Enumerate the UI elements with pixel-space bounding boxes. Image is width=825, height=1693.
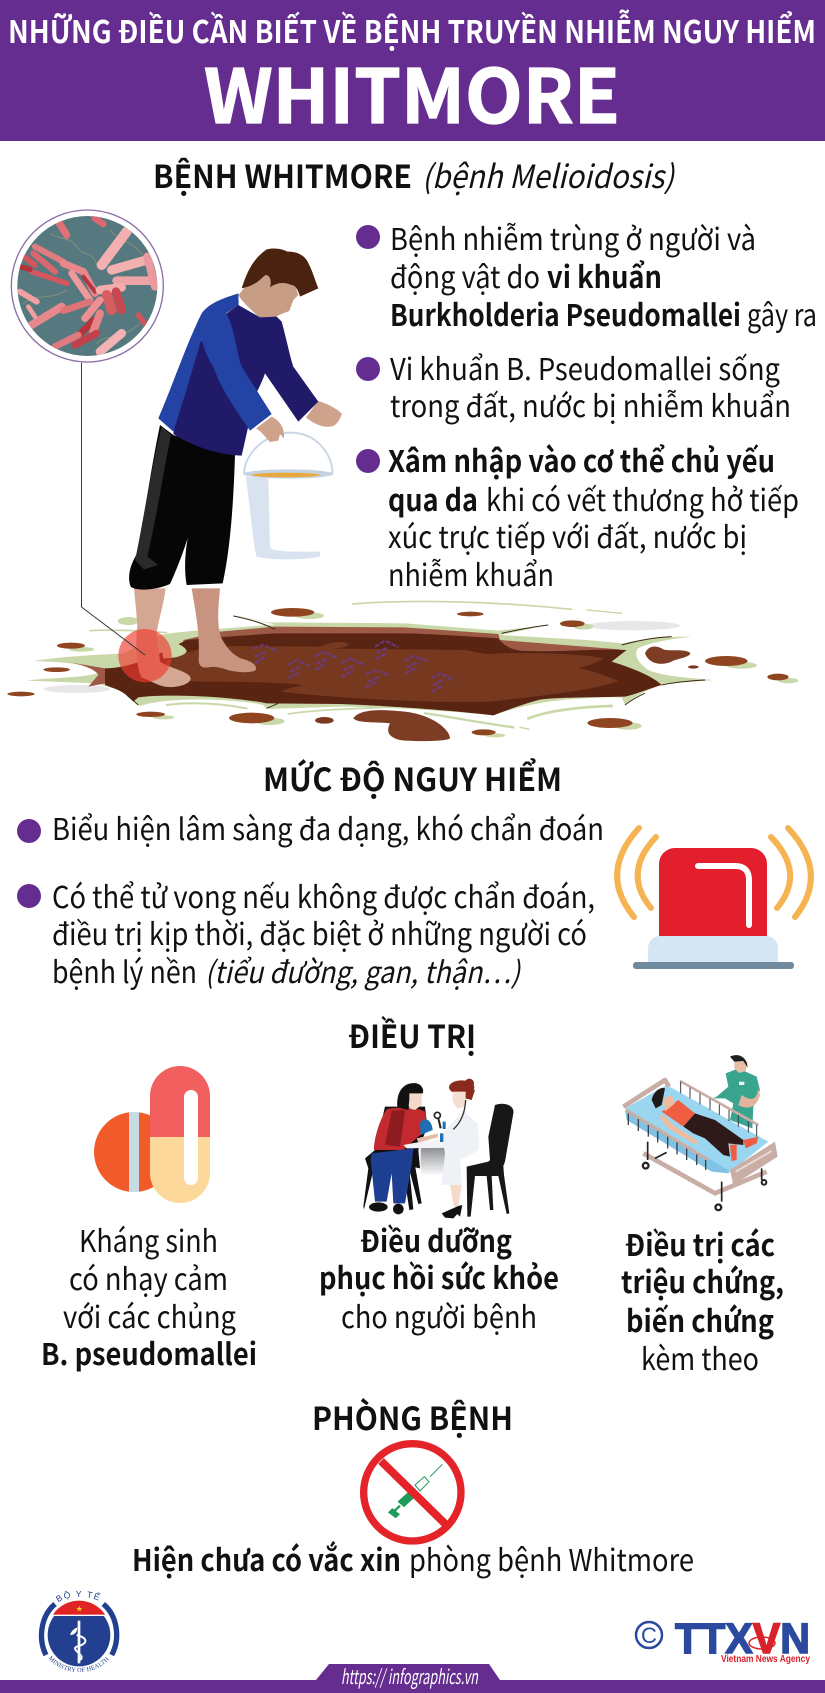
section heading: danger level: MỨC ĐỘ NGUY HIỂM [263, 755, 562, 801]
trouser stripe [135, 427, 171, 569]
treatment text: nursing care [319, 1217, 559, 1337]
light brown edge [183, 627, 662, 686]
bullets: danger level: bệnh lý nền [52, 948, 197, 992]
treatment text: symptoms: kèm theo [641, 1335, 759, 1379]
icon: no vaccine [364, 1444, 461, 1541]
bullets: disease description: Vi khuẩn B. Pseudomallei sống [390, 345, 780, 389]
far arm hand [306, 401, 342, 427]
green patch behind leg [118, 617, 139, 625]
wound highlight [118, 629, 172, 682]
bullets: disease description [356, 215, 817, 595]
foot board [730, 1142, 778, 1185]
logo: Ministry of Health: ★ [76, 1604, 83, 1613]
treatment text: symptoms: biến chứng [626, 1297, 774, 1341]
prevention text: Hiện chưa có vắc xin [132, 1536, 401, 1580]
bullets: disease description: khi có vết thương hở tiếp [486, 476, 799, 520]
mid brown mud [167, 642, 618, 702]
section heading: treatment: ĐIỀU TRỊ [348, 1012, 476, 1058]
footer url: https:// infographics.vn [341, 1661, 479, 1690]
treatment text: symptoms: Điều trị các [625, 1221, 775, 1265]
hair [242, 249, 318, 297]
footer bar [0, 1661, 825, 1693]
neck and face [238, 275, 298, 318]
bullets: danger level: Biểu hiện lâm sàng đa dạng, khó chẩn đoán [52, 805, 604, 849]
bullets: danger level: Có thể tử vong nếu không được chẩn đoán, [52, 873, 595, 917]
icon: bacteria microscope circle [11, 210, 163, 362]
logo: TTXVN: C [641, 1623, 657, 1648]
treatment text: antibiotics: Kháng sinh [79, 1217, 218, 1261]
bullets: disease description: Burkholderia Pseudomallei [390, 291, 741, 335]
bullets: disease description: Xâm nhập vào cơ thể chủ yếu [388, 437, 775, 481]
treatment text: nursing care: phục hồi sức khỏe [319, 1254, 559, 1298]
bullets: disease description: xúc trực tiếp với đất, nước bị [388, 513, 747, 557]
icon: pills [94, 1066, 210, 1203]
head rail [623, 1080, 669, 1107]
treatment text: antibiotics: có nhạy cảm [69, 1255, 228, 1299]
soil shadow [43, 685, 110, 693]
syringe [389, 1464, 442, 1517]
treatment text: symptoms: triệu chứng, [621, 1258, 784, 1302]
treatment text: antibiotics [41, 1217, 257, 1374]
treatment text: symptoms [621, 1221, 784, 1379]
dark brown mud [105, 633, 662, 715]
thin green strokes [90, 601, 622, 729]
patient lying [662, 1100, 695, 1127]
far rail [680, 1081, 758, 1125]
header banner [0, 0, 825, 145]
prevention text: phòng bệnh Whitmore [409, 1536, 694, 1580]
callout line: bacteria to wound [82, 363, 145, 655]
bullets: danger level: (tiểu đường, gan, thận…) [205, 948, 522, 992]
left leg and foot [134, 588, 191, 687]
bed base [643, 1153, 767, 1193]
near hand [256, 417, 284, 442]
section heading: Whitmore disease: BỆNH WHITMORE [153, 152, 412, 198]
wheels [642, 1162, 650, 1170]
bullets: disease description: qua da [388, 476, 478, 520]
patient chair [363, 1107, 427, 1210]
logo: Ministry of Health [38, 1590, 120, 1672]
mud puddle [7, 588, 798, 741]
crack lines [127, 616, 705, 708]
bullets: danger level: điều trị kịp thời, đặc biệt ở những người có [52, 910, 587, 954]
bullets: danger level [17, 805, 604, 992]
treatment text: antibiotics: B. pseudomallei [41, 1330, 257, 1374]
trousers [129, 425, 235, 590]
bullets: disease description: động vật do [390, 253, 540, 297]
table [421, 1148, 447, 1176]
treatment text: antibiotics: với các chủng [63, 1293, 236, 1337]
treatment text: nursing care: cho người bệnh [341, 1293, 537, 1337]
bullets: disease description: vi khuẩn [547, 253, 662, 297]
doctor chair [467, 1104, 513, 1217]
main title: WHITMORE [204, 38, 620, 145]
logo: TTXVN: TTXVN [675, 1615, 810, 1663]
icon: doctor and patient [363, 1079, 513, 1218]
doctor [442, 1110, 479, 1185]
bullets: disease description: nhiễm khuẩn [388, 551, 554, 595]
nurse [713, 1068, 760, 1128]
patient [374, 1108, 428, 1150]
shirt blue sleeve [158, 293, 272, 432]
mattress [625, 1085, 768, 1173]
bullets: disease description: Bệnh nhiễm trùng ở người và [390, 215, 756, 259]
icon: red siren [617, 828, 811, 969]
logo: Ministry of Health: BỘ Y TẾ [56, 1590, 101, 1602]
treatment text: nursing care: Điều dưỡng [360, 1217, 512, 1261]
right leg and foot [192, 588, 256, 672]
bullets: disease description: trong đất, nước bị nhiễm khuẩn [390, 382, 791, 426]
person carrying bucket [129, 249, 342, 590]
section heading: prevention: PHÒNG BỆNH [312, 1394, 513, 1440]
near rail [626, 1110, 708, 1160]
green rim [27, 615, 715, 715]
logo: Ministry of Health: MINISTRY OF HEALTH [48, 1656, 109, 1672]
icon: hospital bed and nurse [623, 1055, 778, 1211]
bucket [243, 433, 333, 559]
splatter blobs [7, 608, 798, 741]
logo: TTXVN: Vietnam News Agency [721, 1654, 810, 1665]
green patch by ankle [160, 640, 187, 658]
shirt body [173, 305, 318, 456]
purple bacteria marks [253, 641, 454, 692]
section heading: Whitmore disease: (bệnh Melioidosis) [422, 152, 675, 198]
